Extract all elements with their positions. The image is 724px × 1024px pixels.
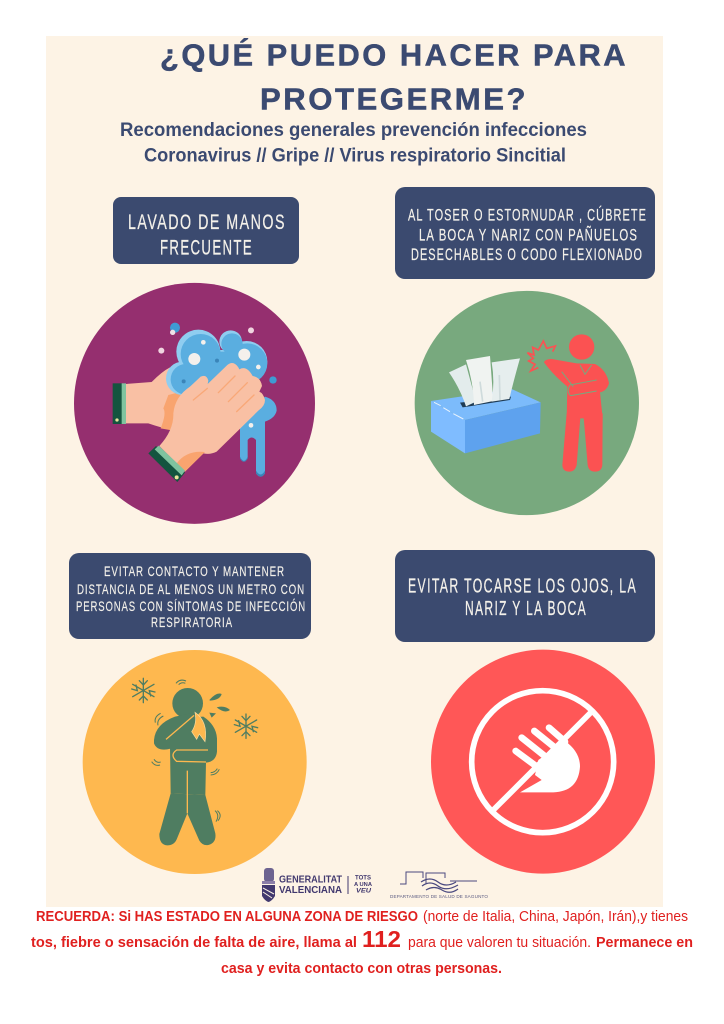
logo: Generalitat Valenciana: GENERALITAT — [279, 874, 342, 886]
panel: avoid touching face label: NARIZ Y LA BOCA — [465, 598, 587, 620]
logo: Departamento de Salud de Sagunto — [390, 872, 488, 899]
subtitle — [120, 120, 587, 166]
icon: tissue box — [431, 356, 541, 453]
icon: snowflake right — [234, 714, 258, 738]
panel: keep distance label: PERSONAS CON SÍNTOMAS DE INFECCIÓN — [76, 598, 306, 614]
callout: reminder text: 112 — [362, 926, 401, 952]
icon: prohibition ring — [472, 691, 614, 833]
title — [160, 38, 628, 116]
icon: front hand with cuff — [148, 363, 265, 482]
callout: reminder text: Permanece en — [596, 935, 693, 951]
logo: Generalitat Valenciana: VALENCIANA — [279, 885, 342, 896]
panel: keep distance label: EVITAR CONTACTO Y MANTENER — [104, 563, 285, 579]
icon: back hand with cuff — [113, 367, 185, 431]
icon: soap foam — [158, 323, 277, 395]
panel: keep distance label: DISTANCIA DE AL MENOS UN METRO CON — [77, 581, 305, 597]
icon: do not touch circle — [431, 650, 655, 874]
icon: shiver marks — [152, 680, 220, 822]
subtitle: Recomendaciones generales prevención infecciones — [120, 120, 587, 141]
title: ¿QUÉ PUEDO HACER PARA — [160, 38, 628, 72]
icon: water drip — [240, 397, 277, 477]
panel: cough etiquette label — [395, 187, 655, 279]
icon: hand washing circle — [74, 283, 315, 524]
icon: crossed hand — [493, 712, 592, 810]
callout: reminder text: (norte de Italia, China, Japón, Irán),y tienes — [423, 909, 688, 925]
panel: hand washing label — [113, 197, 299, 264]
callout: reminder text: casa y evita contacto con otras personas. — [221, 961, 502, 977]
icon: sick person circle — [83, 650, 307, 874]
callout: reminder text: tos, fiebre o sensación de falta de aire, llama al — [31, 935, 357, 951]
callout: reminder text: para que valoren tu situación. — [408, 935, 591, 951]
callout: reminder text — [31, 909, 693, 977]
panel: hand washing label: LAVADO DE MANOS — [128, 210, 286, 234]
panel: poster background — [46, 36, 663, 907]
subtitle: Coronavirus // Gripe // Virus respiratorio Sincitial — [144, 146, 566, 166]
logo: Generalitat Valenciana: TOTS — [355, 874, 372, 882]
panel: hand washing label: FRECUENTE — [160, 236, 253, 260]
icon: tissue circle — [415, 291, 639, 515]
panel: keep distance label — [69, 553, 311, 639]
panel: avoid touching face label — [395, 550, 655, 642]
icon: snowflake left — [132, 678, 155, 703]
title: PROTEGERME? — [260, 82, 528, 116]
logo: Generalitat Valenciana — [262, 868, 372, 902]
icon: crest — [262, 868, 275, 902]
panel: keep distance label: RESPIRATORIA — [151, 614, 233, 630]
logo: Generalitat Valenciana: VEU — [356, 888, 371, 894]
logo: Departamento de Salud de Sagunto: DEPARTAMENTO DE SALUD DE SAGUNTO — [390, 894, 488, 899]
logo: Generalitat Valenciana: A UNA — [354, 882, 372, 888]
icon: sneezing person — [154, 688, 230, 845]
callout: reminder text: RECUERDA: Si HAS ESTADO EN ALGUNA ZONA DE RIESGO — [36, 909, 418, 925]
icon: person coughing into elbow — [527, 334, 609, 472]
